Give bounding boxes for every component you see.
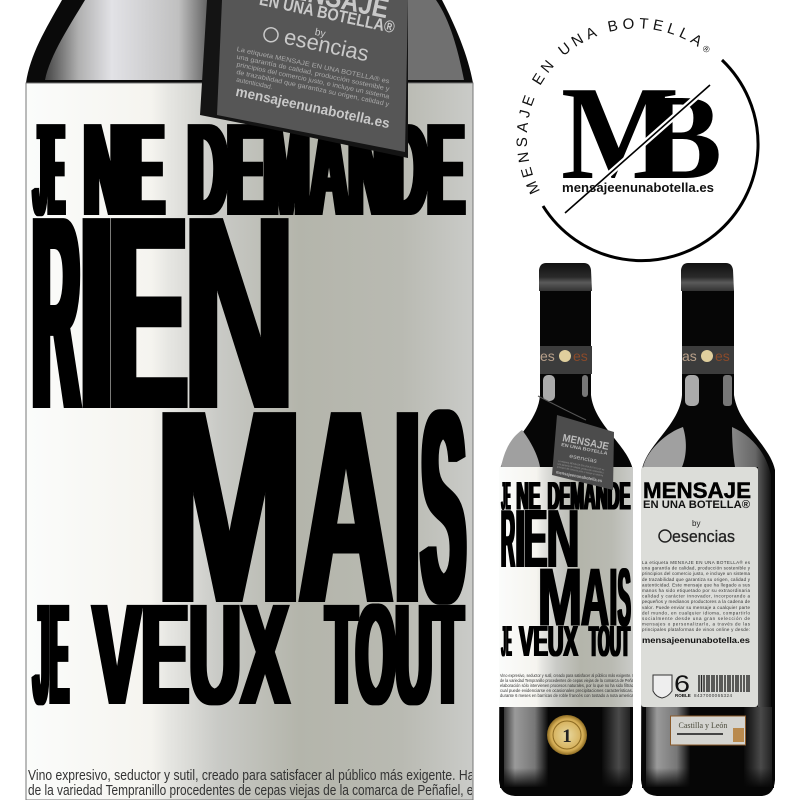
gold medal <box>547 715 587 755</box>
neck band logo: as <box>682 348 697 364</box>
line: je veux tout: JE <box>33 574 69 735</box>
small description: Vino expresivo, seductor y sutil, creado para satisfacer al público más exigente. Ha sido <box>500 673 645 678</box>
small description: durante 6 meses en barricas de roble francés con tostado a nota americano, ap <box>500 693 646 698</box>
number six: 6 <box>674 671 690 698</box>
small description: elaboración sólo intervienen procesos naturales, por lo que no ha sido filtrado para <box>500 683 645 688</box>
ring arc <box>543 60 758 261</box>
esencias logo: esencias <box>672 527 735 546</box>
text: TOUT <box>589 618 630 666</box>
back label body text: La etiqueta MENSAJE EN UNA BOTELLA® es <box>642 559 751 565</box>
small tag: una garantía de calidad, producción sostenible y <box>557 463 605 475</box>
small description <box>500 674 633 697</box>
monogram M: M <box>561 59 679 207</box>
neck highlights <box>685 375 699 406</box>
small message: I <box>610 550 617 643</box>
bottle silhouette <box>499 290 633 796</box>
small message: NE <box>516 474 540 518</box>
neck band logo: es <box>540 348 555 364</box>
back label body text: del mundo, en cualquier idioma, compartirlo <box>642 610 750 615</box>
text: S <box>421 353 465 661</box>
back label body text: pequeños y medianos productores a la cadena de <box>642 599 750 604</box>
small message: JE <box>501 474 511 518</box>
line: rien: E <box>106 159 188 467</box>
line: rien <box>32 218 289 408</box>
back label body text: principales plataformas de vinos online y desde: <box>642 627 750 632</box>
barcode <box>694 675 749 698</box>
small tag: esencias <box>569 454 597 465</box>
base sheen <box>500 707 632 788</box>
small message: VEUX <box>519 618 578 666</box>
back label website: mensajeenunabotella.es <box>642 635 750 645</box>
shoulder highlight <box>501 430 540 467</box>
text: DEMANDE <box>548 474 630 518</box>
neck band <box>682 346 734 374</box>
neck highlights <box>543 375 555 401</box>
small tag: La etiqueta MENSAJE EN UNA BOTELLA® es <box>558 460 605 472</box>
line: je ne demande <box>31 124 466 216</box>
line: mais <box>162 409 467 605</box>
back label body text: principios del comercio justo, e incluye un sistema <box>642 571 750 576</box>
back label body text: manos ha sido etiquetado por su extraordinaria <box>642 588 750 593</box>
small message: R <box>501 492 515 585</box>
small tag: mensajeenunabotella.es <box>556 469 603 483</box>
wine description: de la variedad Tempranillo procedentes de cepas viejas de la comarca de Peñafiel, en <box>28 783 480 799</box>
small tag: principios del comercio justo, e incluye un sistema <box>557 466 604 478</box>
neck band logo: es <box>573 348 588 364</box>
crest <box>653 675 672 698</box>
tag text: by <box>314 27 326 40</box>
back bottle <box>641 263 775 796</box>
neck band logo: es <box>715 348 730 364</box>
small message: A <box>581 550 609 643</box>
line: mais: I <box>394 353 420 661</box>
glass highlight <box>45 0 212 80</box>
small message <box>500 482 633 697</box>
cap <box>681 263 734 291</box>
line: je ne demande: JE <box>33 96 65 243</box>
neck band logo <box>682 348 730 364</box>
back label body text: autenticidad. Este mensaje que ha llegado a sus <box>642 582 751 587</box>
back label body text <box>642 559 751 632</box>
front label <box>499 467 633 707</box>
neck band logo <box>540 348 588 364</box>
small message: S <box>618 550 631 643</box>
text: TOUT <box>326 574 463 735</box>
large message text <box>28 96 500 799</box>
small description: de la variedad Tempranillo procedentes de cepas viejas de la comarca de Peñafiel, en <box>500 678 645 683</box>
small message: M <box>538 550 582 643</box>
tag face <box>217 0 408 152</box>
diagonal slash <box>565 85 710 213</box>
small tag: EN UNA BOTELLA <box>561 442 609 456</box>
tag text <box>236 0 395 128</box>
back label subheading: EN UNA BOTELLA® <box>643 499 750 511</box>
back label body text: mensajes o personalizarlo, a través de las <box>642 622 751 627</box>
castilla y leon sticker: Castilla y León <box>679 721 727 730</box>
small message: JE <box>501 618 512 666</box>
back label body text: calidad y carácter innovador, incorporando a <box>642 594 750 599</box>
large bottle close-up <box>26 0 500 800</box>
tag text: esencias <box>282 24 371 66</box>
line: rien: R <box>32 159 80 467</box>
small tag <box>538 396 614 490</box>
small message: N <box>546 492 580 585</box>
tag text: una garantía de calidad, producción sostenible y <box>236 54 391 93</box>
tag shadow <box>200 0 408 158</box>
small message: E <box>523 492 548 585</box>
wine description: Vino expresivo, seductor y sutil, creado para satisfacer al público más exigente. Ha sido <box>28 768 500 784</box>
back label heading: MENSAJE <box>643 478 751 503</box>
line: je veux tout <box>31 604 466 706</box>
shoulder highlights <box>643 427 686 467</box>
front bottle <box>499 263 646 796</box>
back label body text: de trazabilidad que garantiza su origen, calidad y <box>642 577 751 582</box>
back label body text: socialmente desde una gran selección de <box>642 616 750 621</box>
line: mais: A <box>299 353 393 661</box>
tag text: principios del comercio justo, e incluye un sistema <box>236 61 390 101</box>
wine description <box>28 769 472 798</box>
line: je ne demande: NE <box>84 96 164 243</box>
line: rien: I <box>78 159 115 467</box>
website: mensajeenunabotella.es <box>562 181 714 195</box>
bottle shoulder <box>26 0 473 83</box>
hanging tag <box>200 0 416 158</box>
curved brand name: MENSAJE EN UNA BOTELLA® <box>516 18 710 194</box>
small message: I <box>514 492 526 585</box>
small description: cual puede evidenciarse en ocasionales precipitaciones características. Se ha <box>500 688 646 693</box>
tag text: La etiqueta MENSAJE EN UNA BOTELLA® es <box>236 45 391 86</box>
front label background <box>26 83 473 800</box>
tag text: de trazabilidad que garantiza su origen, calidad y <box>236 69 391 108</box>
roble: ROBLE <box>675 693 691 698</box>
tag text: mensajeenunabotella.es <box>234 83 392 131</box>
brand logo <box>516 18 760 262</box>
line: mais: M <box>154 353 304 661</box>
castilla y leon sticker <box>670 716 746 745</box>
tag text: autenticidad. <box>236 77 273 91</box>
gold medal: 1 <box>562 726 572 747</box>
monogram B: B <box>642 70 722 205</box>
line: je veux tout: VEUX <box>93 574 289 735</box>
bottle silhouette <box>641 290 775 796</box>
by: by <box>692 519 700 528</box>
neck band <box>540 346 592 374</box>
barcode: 8437000065324 <box>694 693 732 698</box>
back label body text: una garantía de calidad, producción sostenible y <box>642 566 751 571</box>
small tag: MENSAJE <box>561 432 610 453</box>
cap <box>539 263 592 291</box>
back label body text: valor. Puede enviar su mensaje a cualquier parte <box>642 605 750 610</box>
base sheen <box>642 707 774 788</box>
line: rien: N <box>183 159 295 467</box>
back label <box>641 467 758 707</box>
